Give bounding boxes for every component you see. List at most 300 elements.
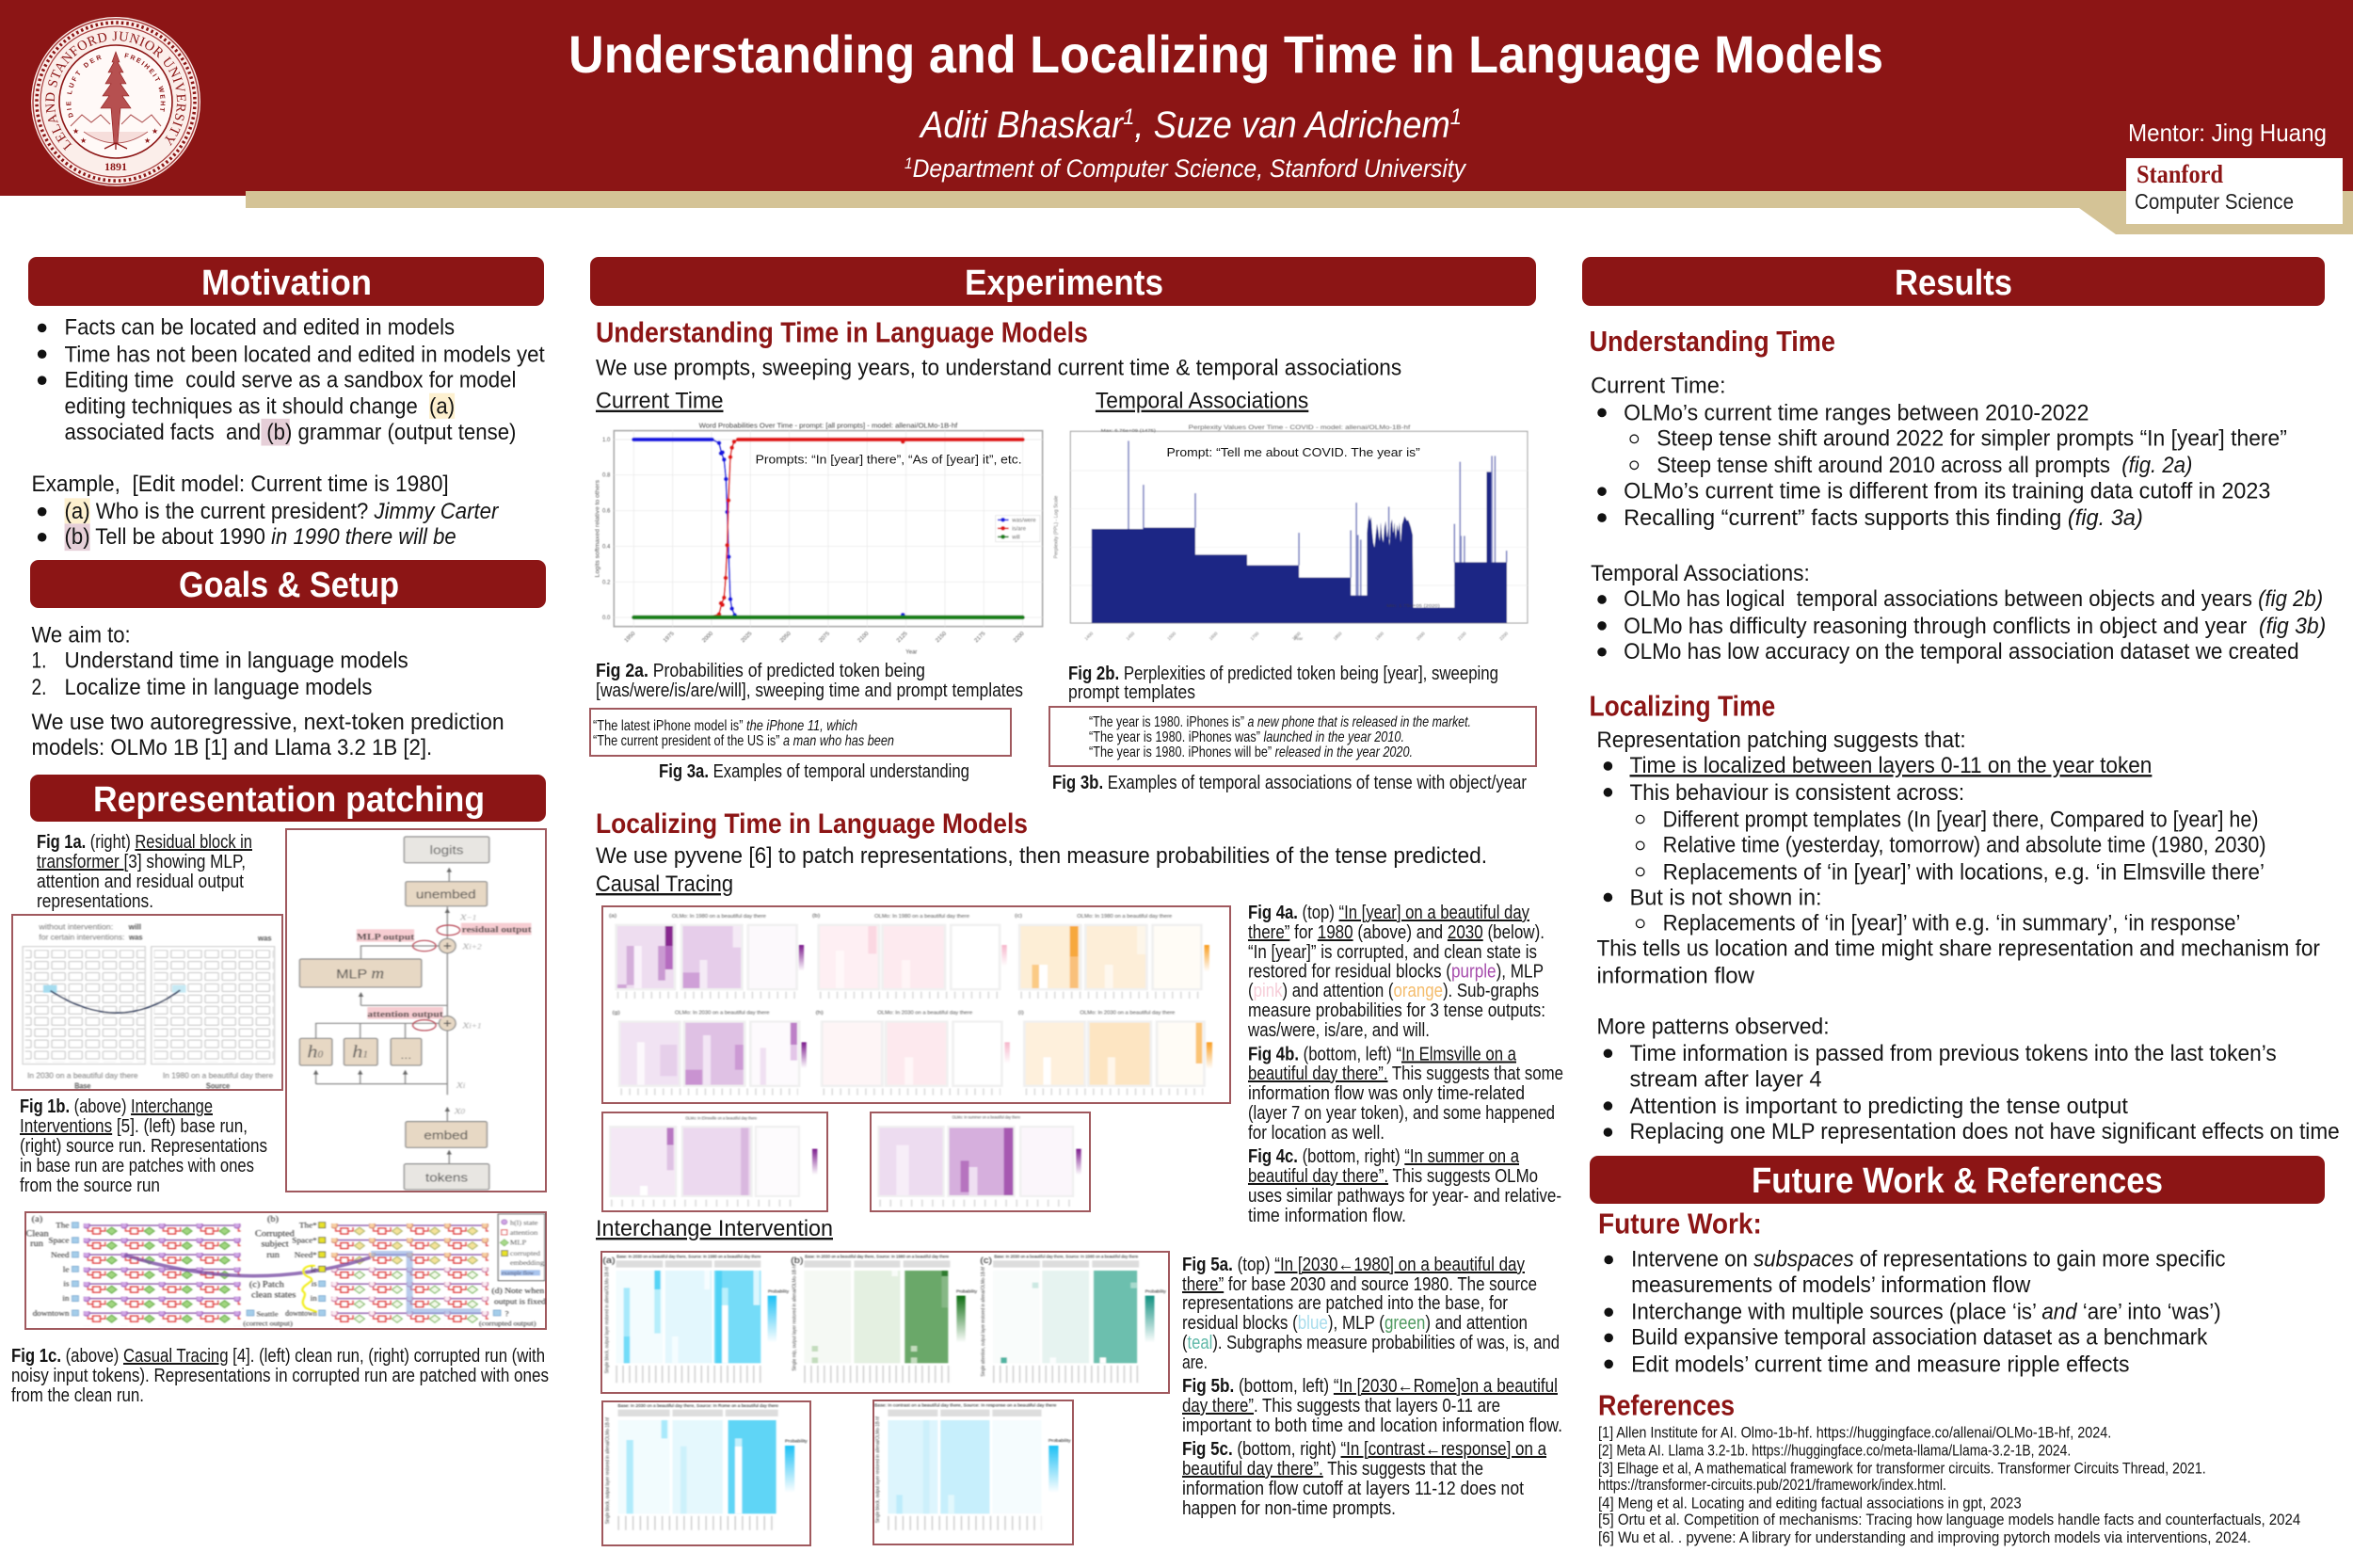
figure: Fig 5a heatmaps xyxy=(601,1252,1169,1393)
figure: Fig 5b heatmap: Base: In 2030 on a beautiful day there, Source: In Rome on a beautiful day there xyxy=(618,1403,778,1409)
mentor: Mentor: Jing Huang xyxy=(2128,119,2327,147)
caption: Fig 1c: Fig 1c. (above) Casual Tracing [4]. (left) clean run, (right) corrupted run (with xyxy=(11,1346,545,1367)
chart: perplexity values over time: 1850 xyxy=(1333,631,1343,641)
text: goals: We aim to: xyxy=(31,622,131,648)
figure: Fig 5a heatmaps: Single attention, output layer restored in allenai/OLMo-1B-hf xyxy=(981,1266,986,1377)
chart: perplexity values over time: 1500 xyxy=(1166,631,1176,641)
subsection: understanding time text: Temporal Associations xyxy=(1096,389,1308,414)
figure: causal tracing diagram: The xyxy=(56,1221,70,1230)
chart: perplexity values over time: 2100 xyxy=(1457,631,1467,641)
figure: interchange interventions: was xyxy=(128,933,143,942)
caption: Fig 5a-5c: representations are patched into the base, for xyxy=(1182,1293,1508,1314)
figure: Fig 5a heatmaps: Probability xyxy=(1145,1289,1166,1294)
figure: causal tracing diagram: (c) Patch xyxy=(249,1280,284,1289)
subsection: localizing time text: Causal Tracing xyxy=(596,872,733,897)
figure: Fig 5a heatmaps: Single mlp, output layer restored in allenai/OLMo-1B-hf xyxy=(792,1264,798,1371)
caption: Fig 5a-5c: (teal). Subgraphs measure probabilities of was, is, and xyxy=(1182,1333,1560,1353)
text: localizing time results: Attention is important to predicting the tense output xyxy=(1630,1094,2128,1119)
figure: causal tracing diagram: clean states xyxy=(251,1290,296,1300)
text: localizing time results xyxy=(1589,692,2340,1144)
figure: Fig 5a heatmaps: Single block, output layer restored in allenai/OLMo-1B-hf xyxy=(604,1266,611,1373)
text: future work: Interchange with multiple sources (place ‘is’ and ‘are’ into ‘was’) xyxy=(1631,1299,2221,1324)
chart: perplexity values over time: 1450 xyxy=(1126,631,1136,641)
text: understanding time results: OLMo has difficulty reasoning through conflicts in object and year (fig 3b) xyxy=(1624,614,2326,639)
heading: Representation patching: Representation patching xyxy=(93,780,485,820)
chart: word probabilities over time: is/are xyxy=(1012,526,1027,532)
caption: Fig 5a-5c: day there”. This suggests that layers 0-11 are xyxy=(1182,1396,1500,1416)
figure: Fig 5b heatmap: Single block, output layer restored in allenai/OLMo-1B-hf xyxy=(605,1416,611,1524)
heading: Future Work & References xyxy=(1590,1156,2325,1204)
figure: transformer residual block: x0 xyxy=(454,1103,466,1116)
text: motivation bullets: Time has not been located and edited in models yet xyxy=(65,342,545,367)
figure: causal tracing diagram: (a) xyxy=(32,1215,42,1224)
figure: interchange interventions: Source xyxy=(206,1081,230,1090)
chart: word probabilities over time: 2125 xyxy=(896,631,909,644)
chart: word probabilities over time: 2100 xyxy=(857,631,871,644)
figure: causal tracing diagram: Corrupted xyxy=(255,1229,295,1239)
text: references: [1] Allen Institute for AI. Olmo-1b-hf. https://huggingface.co/allenai/OLMo-1B-hf, 2024. xyxy=(1598,1423,2111,1441)
text: motivation bullets: (a) Who is the current president? Jimmy Carter xyxy=(65,499,499,524)
chart: word probabilities over time: 1950 xyxy=(624,631,637,644)
figure: Fig 5b heatmap xyxy=(602,1401,810,1545)
caption: Fig 4a-4c: restored for residual blocks (purple), MLP xyxy=(1248,962,1544,983)
chart: word probabilities over time: will xyxy=(1011,535,1020,540)
chart: perplexity values over time: Max: 6.76e+09 (1475) xyxy=(1101,428,1157,433)
figure: causal tracing diagram: Seattle xyxy=(256,1310,279,1319)
figure: transformer residual block xyxy=(286,829,546,1192)
heatmap grid: attention 1980 xyxy=(1018,924,1209,990)
figure: causal tracing diagram: run xyxy=(30,1240,43,1249)
figure: causal tracing diagram: (corrupted output) xyxy=(479,1320,536,1328)
text: localizing time results: Localizing Time xyxy=(1589,692,1775,723)
figure: causal tracing diagram: Space xyxy=(49,1236,70,1245)
figure: causal tracing diagram: downtown xyxy=(285,1309,317,1318)
text: motivation bullets: (b) Tell be about 1990 in 1990 there will be xyxy=(65,524,456,550)
subsection: localizing time text xyxy=(596,808,1487,897)
chart: word probabilities over time: 2000 xyxy=(701,631,715,644)
figure: causal tracing diagram: corrupted xyxy=(510,1249,540,1257)
caption: Fig 1c xyxy=(11,1346,549,1406)
chart: word probabilities over time: Word Probabilities Over Time - prompt: [all prompts] - model: allenai/OLMo-1B-hf xyxy=(699,421,958,429)
figure: Fig 4a heatmaps: OLMo: In 1980 on a beautiful day there xyxy=(672,915,767,920)
figure: causal tracing diagram: The* xyxy=(299,1221,317,1230)
caption: Fig 1b: Fig 1b. (above) Interchange xyxy=(20,1096,213,1117)
chart: perplexity values over time: 1800 xyxy=(1291,631,1302,641)
header band xyxy=(0,0,2353,234)
text: localizing time results: More patterns observed: xyxy=(1596,1015,1830,1040)
heatmap grid: mlp 2030 xyxy=(821,1020,1010,1087)
figure: Fig 5a heatmaps: Base: In 2030 on a beautiful day there, Source: In 1980 on a beautiful day there xyxy=(616,1255,761,1259)
heading: Results: Results xyxy=(1895,264,2012,303)
caption: Fig 4a-4c: (layer 7 on year token), and some happened xyxy=(1248,1103,1555,1124)
figure: Fig 3b examples box xyxy=(1049,707,1536,766)
caption: Fig 4a-4c: beautiful day there”. This suggests that some xyxy=(1248,1064,1563,1084)
text: future work: Edit models’ current time and measure ripple effects xyxy=(1631,1352,2129,1377)
Stanford CS logo box: Stanford xyxy=(2137,160,2223,188)
text: localizing time results: This behaviour is consistent across: xyxy=(1630,780,1964,806)
chart: perplexity values over time: Prompt: “Tell me about COVID. The year is” xyxy=(1166,445,1420,459)
Stanford seal logo: DIE LUFT DER xyxy=(66,55,102,118)
text: understanding time results: OLMo has low accuracy on the temporal association dataset we created xyxy=(1624,639,2299,664)
chart: word probabilities over time: 1975 xyxy=(663,631,676,644)
text: understanding time results: OLMo has logical temporal associations between objects and years (fig 2b) xyxy=(1624,586,2323,612)
figure: transformer residual block: logits xyxy=(430,843,463,857)
figure: causal tracing diagram: ? xyxy=(505,1309,509,1319)
text: motivation bullets: Facts can be located and edited in models xyxy=(65,315,455,341)
figure: Fig 4b heatmap: OLMo: In Elmsville on a beautiful day there xyxy=(685,1116,757,1121)
caption: Fig 4a-4c: was/were, is/are, and will. xyxy=(1247,1020,1430,1041)
figure: interchange interventions: will xyxy=(128,922,141,932)
authors: Aditi Bhaskar xyxy=(920,104,1143,146)
figure: Fig 4b heatmap xyxy=(602,1112,827,1211)
figure: Fig 5a heatmaps: Probability xyxy=(956,1289,977,1294)
caption: Fig 2b: prompt templates xyxy=(1068,682,1195,703)
heatmap grid: mlp 1980 xyxy=(817,924,1007,990)
Stanford seal logo: ★ xyxy=(80,136,87,145)
caption: Fig 4a-4c: time information flow. xyxy=(1248,1206,1406,1226)
caption: Fig 2b: Fig 2b. Perplexities of predicted token being [year], sweeping xyxy=(1068,664,1498,684)
caption: Fig 2a xyxy=(596,661,1023,701)
subsection: localizing time text: Localizing Time in Language Models xyxy=(596,808,1028,840)
text: goals: We use two autoregressive, next-token prediction xyxy=(31,710,504,735)
text: motivation bullets: editing techniques as it should change (a) xyxy=(65,393,455,419)
title: Understanding and Localizing Time in Language Models xyxy=(568,24,1883,84)
text: references: [6] Wu et al. . pyvene: A library for understanding and improving pytorch models via interventions, 2024. xyxy=(1598,1528,2251,1546)
text: understanding time results: Steep tense shift around 2022 for simpler prompts “In [year] there” xyxy=(1657,426,2287,452)
figure: causal tracing diagram: (b) xyxy=(267,1215,279,1224)
caption: Fig 3b: Fig 3b. Examples of temporal associations of tense with object/year xyxy=(1052,773,1527,793)
figure: interchange interventions: without intervention: xyxy=(38,922,113,932)
figure: causal tracing diagram: le xyxy=(63,1265,70,1273)
heading: Goals & Setup: Goals & Setup xyxy=(179,566,399,605)
caption: Fig 4a-4c: Fig 4a. (top) “In [year] on a beautiful day xyxy=(1248,903,1529,923)
heading: Goals & Setup xyxy=(30,560,546,608)
caption: Fig 5a-5c: information flow cutoff at layers 11-12 does not xyxy=(1182,1479,1524,1499)
figure: transformer residual block: ... xyxy=(401,1048,411,1062)
chart: word probabilities over time: 2150 xyxy=(935,631,949,644)
caption: Fig 5a-5c: Fig 5a. (top) “In [2030←1980] on a beautiful day xyxy=(1182,1255,1525,1275)
heatmap grid: attention 2030 xyxy=(1023,1020,1212,1087)
text: motivation bullets: Example, [Edit model: Current time is 1980] xyxy=(31,472,449,497)
caption: Fig 2a: Fig 2a. Probabilities of predicted token being xyxy=(596,661,925,681)
Stanford seal logo: 1891 xyxy=(104,160,127,173)
chart: perplexity values over time: 1600 xyxy=(1209,631,1219,641)
figure: causal tracing diagram: is xyxy=(63,1279,70,1288)
figure: causal tracing diagram: subject xyxy=(261,1240,289,1249)
caption: Fig 4a-4c: Fig 4b. (bottom, left) “In Elmsville on a xyxy=(1248,1045,1517,1065)
figure: transformer residual block: embed xyxy=(424,1128,468,1143)
figure: Fig 4a heatmaps: OLMo: In 2030 on a beautiful day there xyxy=(675,1011,770,1016)
text: understanding time results xyxy=(1589,327,2326,664)
caption: Fig 5a-5c: happen for non-time prompts. xyxy=(1182,1498,1396,1519)
caption: Fig 4a-4c: uses similar pathways for year- and relative- xyxy=(1248,1186,1561,1207)
chart: perplexity values over time: Perplexity Values Over Time - COVID - model: allenai/OLMo-1B-hf xyxy=(1189,424,1410,431)
text: understanding time results: Current Time: xyxy=(1591,374,1726,399)
chart: perplexity values over time: 1900 xyxy=(1374,631,1385,641)
figure: Fig 4a heatmaps: (a) xyxy=(609,914,616,919)
figure: transformer residual block: xi+2 xyxy=(462,938,482,952)
text: understanding time results: Recalling “current” facts supports this finding (fig. 3a) xyxy=(1624,505,2143,531)
caption: Fig 5a-5c xyxy=(1182,1255,1562,1519)
text: future work: Future Work: xyxy=(1598,1209,1762,1240)
figure: interchange interventions: Base xyxy=(74,1081,91,1090)
text: references: https://transformer-circuits.pub/2021/framework/index.html. xyxy=(1598,1476,1946,1494)
affiliation: Department of Computer Science, Stanford University xyxy=(913,154,1466,183)
chart: perplexity values over time: Perplexity (PPL) - Log Scale xyxy=(1053,496,1059,558)
text: references: [2] Meta AI. Llama 3.2-1b. https://huggingface.co/meta-llama/Llama-3.2-1B, 2024. xyxy=(1598,1442,2071,1460)
text: localizing time results: Replacements of ‘in [year]’ with locations, e.g. ‘in Elmsville there’ xyxy=(1663,859,2265,885)
authors: 1 xyxy=(1450,104,1462,130)
figure: interchange interventions: In 2030 on a beautiful day there xyxy=(27,1071,138,1080)
heading: Experiments xyxy=(590,257,1536,306)
figure: causal tracing diagram: downtown xyxy=(33,1309,70,1318)
text: localizing time results: This tells us location and time might share representation and mechanism for xyxy=(1596,936,2320,962)
caption: Fig 1a xyxy=(37,832,252,912)
subsection: localizing time text: We use pyvene [6] to patch representations, then measure probabilities of the tense predicted. xyxy=(596,843,1487,869)
caption: Fig 5a-5c: important to both time and location information flow. xyxy=(1182,1416,1562,1436)
Stanford seal logo: LELAND STANFORD JUNIOR UNIVERSITY xyxy=(45,32,186,151)
caption: Fig 1b xyxy=(20,1096,267,1196)
chart: perplexity values over time xyxy=(1053,424,1528,641)
text: goals: 2. xyxy=(31,675,46,700)
caption: Fig 4a-4c: “In [year]” is corrupted, and clean state is xyxy=(1248,942,1537,963)
figure: transformer residual block: tokens xyxy=(425,1171,468,1185)
caption: Fig 4a-4c: (pink) and attention (orange). Sub-graphs xyxy=(1248,981,1539,1001)
figure: transformer residual block: MLP m xyxy=(336,964,384,982)
figure: Fig 5b heatmap: Probability xyxy=(785,1439,808,1444)
caption: Fig 4a-4c: measure probabilities for 3 tense outputs: xyxy=(1248,1000,1545,1021)
chart: word probabilities over time xyxy=(596,421,1043,656)
figure: transformer residual block: h1 xyxy=(352,1041,368,1062)
text: localizing time results: stream after layer 4 xyxy=(1630,1066,1822,1092)
figure: Fig 5a heatmaps: (b) xyxy=(791,1256,804,1266)
chart: perplexity values over time: 2200 xyxy=(1498,631,1509,641)
figure: causal tracing diagram: Need xyxy=(51,1251,70,1259)
chart: word probabilities over time: 2050 xyxy=(779,631,792,644)
caption: Fig 4a-4c: there” for 1980 (above) and 2030 (below). xyxy=(1248,922,1545,943)
figure: transformer residual block: MLP output xyxy=(357,933,415,942)
caption: Fig 5a-5c: are. xyxy=(1182,1352,1208,1373)
figure: Fig 4a heatmaps: (b) xyxy=(812,914,820,919)
text: understanding time results: Temporal Associations: xyxy=(1591,561,1810,586)
figure: Fig 5a heatmaps: Probability xyxy=(768,1289,789,1294)
chart: word probabilities over time: 0.2 xyxy=(602,580,611,585)
chart: word probabilities over time: Logits softmaxed relative to others xyxy=(596,480,601,577)
caption: Fig 5a-5c: Fig 5c. (bottom, right) “In [contrast←response] on a xyxy=(1182,1439,1547,1460)
text: localizing time results: But is not shown in: xyxy=(1630,885,1822,910)
chart: perplexity values over time: 2000 xyxy=(1416,631,1426,641)
figure: transformer residual block: attention output xyxy=(367,1010,443,1019)
figure: causal tracing diagram: h(l) state xyxy=(510,1219,538,1226)
figure: Fig 4a heatmaps: (g) xyxy=(613,1011,620,1016)
Stanford seal logo: ★ xyxy=(144,136,151,145)
figure: Fig 4a heatmaps: (c) xyxy=(1015,914,1022,919)
caption: Fig 5a-5c: Fig 5b. (bottom, left) “In [2030←Rome]on a beautiful xyxy=(1182,1376,1558,1397)
label: Interchange Intervention: Interchange Intervention xyxy=(596,1216,833,1241)
caption: Fig 4a-4c: Fig 4c. (bottom, right) “In summer on a xyxy=(1248,1146,1520,1167)
figure: Fig 4c heatmap xyxy=(871,1112,1090,1211)
figure: Fig 4a heatmaps: OLMo: In 2030 on a beautiful day there xyxy=(1080,1011,1176,1016)
figure: causal tracing diagram: (d) Note when xyxy=(491,1287,545,1296)
figure: causal tracing diagram: MLP xyxy=(510,1239,527,1247)
chart: word probabilities over time: 2025 xyxy=(741,631,754,644)
chart: word probabilities over time: 0.0 xyxy=(602,616,611,621)
figure: Fig 4c heatmap: OLMo: In summer on a beautiful day there xyxy=(952,1115,1020,1120)
figure: causal tracing diagram: embedding xyxy=(510,1258,544,1267)
figure: Fig 4a heatmaps: OLMo: In 1980 on a beautiful day there xyxy=(1077,915,1173,920)
caption: Fig 4a-4c: for location as well. xyxy=(1248,1123,1385,1144)
figure: Fig 3b examples box: “The year is 1980. iPhones was” launched in the year 2010. xyxy=(1089,729,1404,745)
heatmap grid: residual 1980 xyxy=(615,924,804,990)
chart: word probabilities over time: 0.4 xyxy=(602,544,611,550)
caption: Fig 3a: Fig 3a. Examples of temporal understanding xyxy=(659,761,969,782)
text: understanding time results: OLMo’s current time is different from its training data cutoff in 2023 xyxy=(1624,478,2270,504)
text: goals: 1. xyxy=(31,648,46,674)
figure: Fig 5c heatmap xyxy=(873,1400,1073,1544)
figure: Fig 3a examples box: “The latest iPhone model is” the iPhone 11, which xyxy=(593,718,857,734)
text: localizing time results: Replacements of ‘in [year]’ with e.g. ‘in summary’, ‘in response’ xyxy=(1663,911,2240,936)
Stanford seal logo: ★ xyxy=(72,127,79,136)
figure: causal tracing diagram: Need* xyxy=(295,1251,317,1259)
chart: perplexity values over time: 1400 xyxy=(1083,631,1095,641)
caption: Fig 1a: representations. xyxy=(37,891,153,912)
Stanford seal logo xyxy=(31,17,200,186)
subsection: understanding time text xyxy=(596,318,1401,414)
figure: Fig 5c heatmap: Base: In contrast on a beautiful day there, Source: In response on a beautiful day there xyxy=(874,1403,1057,1408)
text: motivation bullets xyxy=(31,315,545,551)
text: localizing time results: Representation patching suggests that: xyxy=(1596,728,1966,753)
chart: word probabilities over time: 2175 xyxy=(974,631,987,644)
heading: Representation patching xyxy=(30,775,546,822)
figure: Fig 3a examples box: “The current president of the US is” a man who has been xyxy=(593,733,894,749)
figure: causal tracing diagram: in xyxy=(311,1294,318,1303)
figure: Fig 3a examples box xyxy=(590,709,1011,756)
heading: Motivation xyxy=(28,257,544,306)
chart: perplexity values over time: Year xyxy=(1294,636,1304,641)
subsection: understanding time text: Current Time xyxy=(596,389,724,414)
caption: Fig 2b xyxy=(1068,664,1498,703)
chart: word probabilities over time: 0.8 xyxy=(602,473,611,479)
figure: transformer residual block: h0 xyxy=(307,1041,324,1062)
figure: causal tracing diagram: is xyxy=(312,1279,317,1288)
caption: Fig 5a-5c: beautiful day there”. This suggests that the xyxy=(1182,1459,1483,1480)
figure: causal tracing diagram: output is fixed xyxy=(494,1297,546,1306)
figure: interchange interventions xyxy=(12,915,282,1090)
text: motivation bullets: Editing time could serve as a sandbox for model xyxy=(65,367,516,392)
figure: Fig 5a heatmaps: Base: In 2030 on a beautiful day there, Source: In 1980 on a beautiful day there xyxy=(805,1255,949,1259)
figure: Fig 5c heatmap: Probability xyxy=(1048,1438,1071,1444)
text: understanding time results: Understanding Time xyxy=(1589,327,1835,358)
figure: Fig 5c heatmap: Single block, output layer restored in allenai/OLMo-1B-hf xyxy=(875,1416,881,1523)
text: future work: measurements of models’ information flow xyxy=(1631,1272,2031,1298)
caption: Fig 1b: (right) source run. Representations xyxy=(20,1136,267,1157)
heading: Motivation: Motivation xyxy=(201,264,372,303)
text: goals: Localize time in language models xyxy=(65,675,372,700)
authors: 1 xyxy=(1123,104,1134,130)
heading: Results xyxy=(1582,257,2325,306)
chart: word probabilities over time: 2075 xyxy=(818,631,832,644)
caption: Fig 5a-5c: residual blocks (blue), MLP (green) and attention xyxy=(1182,1313,1528,1334)
caption: Fig 4a-4c: information flow was only time-related xyxy=(1248,1083,1525,1104)
chart: perplexity values over time: 1700 xyxy=(1250,631,1260,641)
caption: Fig 1c: from the clean run. xyxy=(11,1385,144,1406)
text: references: References xyxy=(1598,1391,1735,1422)
text: motivation bullets: associated facts and (b) grammar (output tense) xyxy=(65,420,516,445)
caption: Fig 2a: [was/were/is/are/will], sweeping time and prompt templates xyxy=(596,680,1023,701)
Stanford seal logo: FREIHEIT WEHT xyxy=(124,53,166,112)
text: localizing time results: Different prompt templates (In [year] there, Compared to [year] he) xyxy=(1663,808,2259,833)
chart: word probabilities over time: Prompts: “In [year] there”, “As of [year] it”, etc. xyxy=(756,453,1022,467)
caption: Fig 1c: noisy input tokens). Representations in corrupted run are patched with ones xyxy=(11,1366,549,1386)
figure: Fig 4a heatmaps: (i) xyxy=(1018,1011,1024,1016)
figure: causal tracing diagram: attention xyxy=(510,1228,537,1237)
Stanford CS logo box: Computer Science xyxy=(2135,189,2294,214)
text: future work xyxy=(1598,1209,2226,1377)
text: future work: Intervene on subspaces of representations to gain more specific xyxy=(1631,1247,2226,1272)
figure: causal tracing diagram: le xyxy=(311,1265,317,1273)
figure: causal tracing diagram: example flow xyxy=(502,1270,535,1277)
caption: Fig 1a: attention and residual output xyxy=(37,872,244,892)
figure: Fig 3b examples box: “The year is 1980. iPhones will be” released in the year 2020. xyxy=(1089,744,1413,760)
figure: transformer residual block: xi xyxy=(456,1078,466,1091)
text: localizing time results: Relative time (yesterday, tomorrow) and absolute time (1980, 2030) xyxy=(1663,833,2266,858)
Stanford CS logo box xyxy=(2126,158,2343,224)
Stanford seal logo: ★ xyxy=(152,127,158,136)
figure: causal tracing diagram: Clean xyxy=(26,1229,49,1239)
figure: causal tracing diagram: Space* xyxy=(292,1236,317,1245)
figure: Fig 4a heatmaps: OLMo: In 1980 on a beautiful day there xyxy=(874,915,970,920)
chart: word probabilities over time: Year xyxy=(905,650,917,656)
caption: Fig 1a: transformer [3] showing MLP, xyxy=(37,852,246,872)
text: localizing time results: information flow xyxy=(1596,963,1755,988)
figure: interchange interventions: was xyxy=(257,934,272,942)
figure: transformer residual block: xi+1 xyxy=(462,1017,482,1031)
figure: causal tracing diagram: in xyxy=(62,1294,70,1303)
subsection: understanding time text: We use prompts, sweeping years, to understand current time & temporal associations xyxy=(596,356,1401,381)
figure: Fig 5a heatmaps: (a) xyxy=(602,1256,616,1266)
text: localizing time results: Time is localized between layers 0-11 on the year token xyxy=(1630,753,2152,778)
heading: Future Work & References: Future Work & References xyxy=(1752,1161,2163,1201)
affiliation: 1 xyxy=(904,154,913,172)
caption: Fig 5a-5c: there” for base 2030 and source 1980. The source xyxy=(1182,1274,1537,1295)
caption: Fig 1b: Interventions [5]. (left) base run, xyxy=(20,1116,248,1137)
text: understanding time results: Steep tense shift around 2010 across all prompts (fig. 2a) xyxy=(1657,453,2192,478)
text: references: [3] Elhage et al, A mathematical framework for transformer circuits. Transformer Circuits Thread, 2021. xyxy=(1598,1460,2206,1478)
text: goals: Understand time in language models xyxy=(65,648,408,674)
heatmap grid: residual 2030 xyxy=(618,1020,807,1087)
authors: , Suze van Adrichem xyxy=(1134,104,1450,146)
figure: causal tracing diagram xyxy=(25,1212,546,1329)
text: localizing time results: Time information is passed from previous tokens into the last token’s xyxy=(1630,1041,2277,1066)
caption: Fig 4a-4c xyxy=(1247,903,1563,1226)
heading: Experiments: Experiments xyxy=(965,264,1163,303)
figure: transformer residual block: unembed xyxy=(416,888,476,902)
chart: word probabilities over time: 0.6 xyxy=(602,509,611,515)
subsection: understanding time text: Understanding Time in Language Models xyxy=(596,318,1088,349)
figure: causal tracing diagram: run xyxy=(266,1251,280,1260)
chart: perplexity values over time: Min: 1.75e+05 (2020) xyxy=(1386,603,1440,608)
text: references xyxy=(1598,1391,2300,1546)
chart: word probabilities over time: 2200 xyxy=(1013,631,1026,644)
chart: word probabilities over time: was/were xyxy=(1011,518,1036,523)
text: references: [4] Meng et al. Locating and editing factual associations in gpt, 2023 xyxy=(1598,1494,2022,1512)
figure: Fig 3b examples box: “The year is 1980. iPhones is” a new phone that is released in the market. xyxy=(1089,714,1471,730)
text: goals xyxy=(31,622,504,760)
figure: interchange interventions: for certain interventions: xyxy=(39,933,124,942)
figure: causal tracing diagram: (correct output) xyxy=(243,1320,293,1328)
caption: Fig 1b: from the source run xyxy=(20,1176,160,1196)
text: future work: Build expansive temporal association dataset as a benchmark xyxy=(1631,1325,2207,1351)
